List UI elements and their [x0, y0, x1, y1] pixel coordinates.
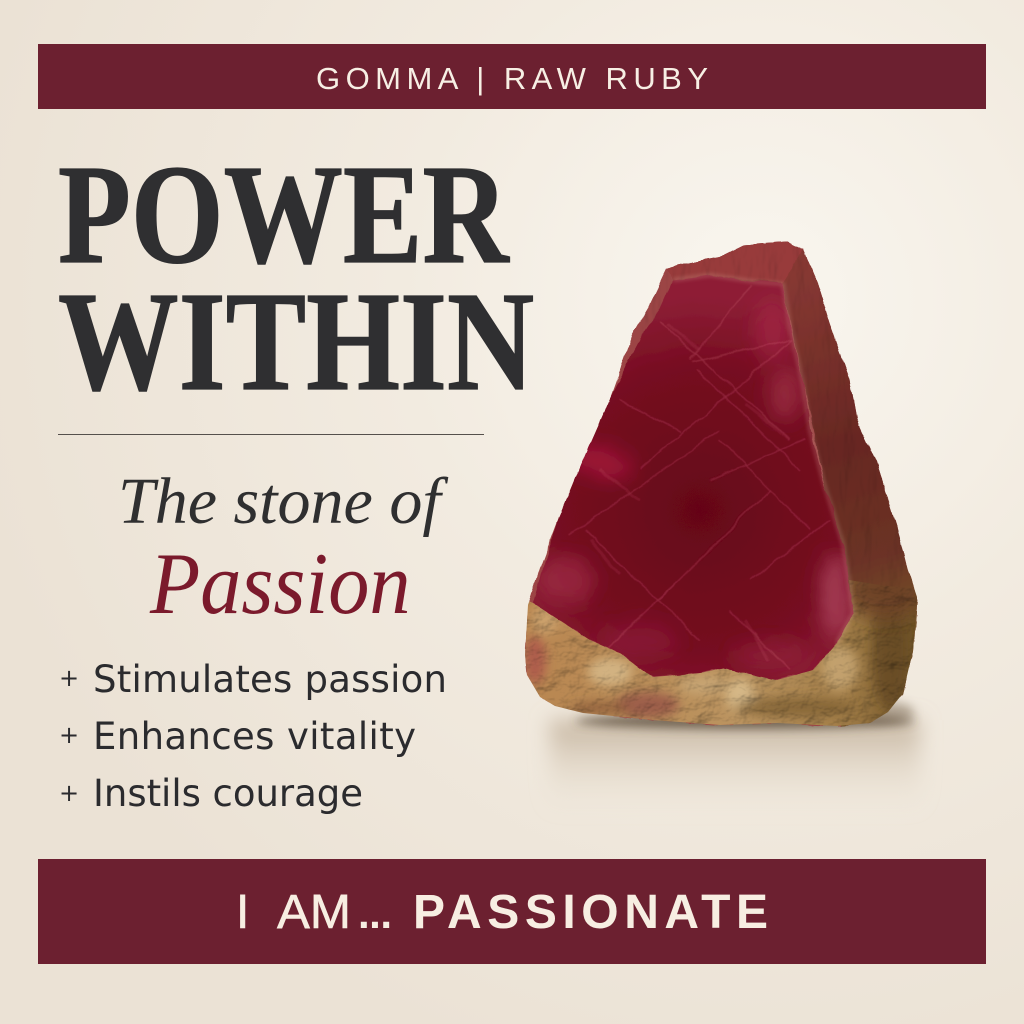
light patches	[535, 300, 851, 669]
rock body	[515, 235, 925, 740]
stone shadow and reflection	[550, 702, 920, 810]
base lumps	[525, 580, 917, 726]
divider	[58, 434, 484, 435]
seam blend between side and base	[849, 580, 917, 624]
benefits list	[59, 658, 447, 815]
subtitle	[118, 465, 448, 633]
title: POWER	[58, 136, 510, 293]
fracture lines	[570, 285, 830, 670]
benefit: instils courage: Instils courage	[93, 772, 363, 815]
title: WITHIN	[58, 263, 534, 420]
pale face rim	[673, 275, 853, 643]
subtitle: Passion	[149, 536, 411, 633]
raw ruby stone	[515, 235, 927, 740]
footer banner: I	[236, 886, 249, 939]
benefit: enhances vitality: Enhances vitality	[93, 715, 416, 758]
tan highlights	[525, 606, 906, 720]
benefit: stimulates passion: Stimulates passion	[93, 658, 447, 701]
rock side texture	[644, 250, 902, 548]
footer banner: PASSIONATE	[413, 886, 768, 939]
benefit: stimulates passion: +	[59, 664, 79, 692]
title	[58, 136, 534, 420]
subtitle: The stone of	[118, 465, 448, 538]
ruby face	[525, 270, 860, 685]
benefit: instils courage: +	[59, 779, 79, 807]
footer banner: AM	[277, 886, 351, 939]
benefit: enhances vitality: +	[59, 721, 79, 749]
header banner: GOMMA | RAW RUBY	[316, 61, 708, 96]
footer banner: ...	[358, 890, 392, 937]
footer banner	[38, 859, 986, 964]
header banner	[38, 44, 986, 109]
